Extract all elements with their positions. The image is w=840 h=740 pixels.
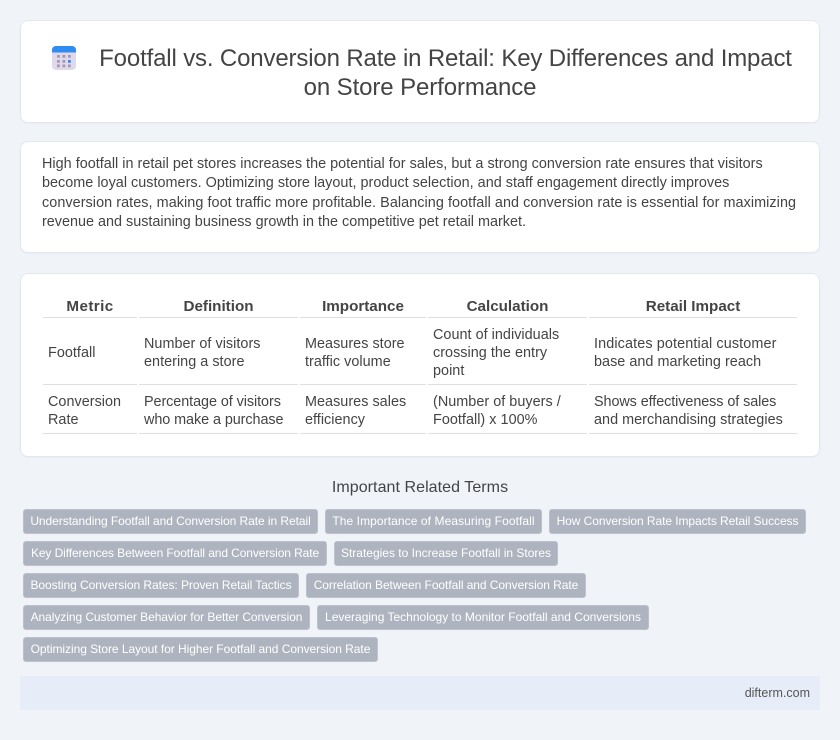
row: conversion rate: Measures sales [305,394,406,410]
related term chips: Optimizing Store Layout for Higher Footfall and Conversion Rate [31,642,370,656]
row: footfall: Count of individuals [433,327,559,343]
header row: Retail Impact [646,298,740,315]
icon: calendar [52,46,76,70]
related term chips: Understanding Footfall and Conversion Rate in Retail [30,514,311,528]
related term chips: Strategies to Increase Footfall in Stores [341,546,551,560]
title: Footfall vs. Conversion Rate in Retail: Key Differences and Impact [99,45,792,72]
related term chips: How Conversion Rate Impacts Retail Success [557,514,798,528]
row: conversion rate: Footfall) x 100% [433,412,537,428]
row: conversion rate: Shows effectiveness of sales [594,394,776,410]
row: conversion rate: and merchandising strategies [594,412,783,428]
header panel [20,20,820,123]
intro paragraph: become loyal customers. Optimizing store layout, product selection, and staff engagement directly improves [42,175,729,191]
header row [66,298,740,315]
comparison table [43,298,797,434]
related terms heading: Important Related Terms [332,478,508,496]
title [99,45,792,101]
row: conversion rate: (Number of buyers / [433,394,561,410]
title: on Store Performance [304,74,536,101]
related term chips: Analyzing Customer Behavior for Better Conversion [31,610,302,624]
row: conversion rate: Conversion [48,394,121,410]
intro text panel [20,141,820,253]
related term chips: Key Differences Between Footfall and Conversion Rate [31,546,319,560]
footer bar [20,676,820,710]
row: footfall: Indicates potential customer [594,336,777,352]
row: footfall: point [433,363,464,379]
header row: Calculation [467,298,548,315]
header row: Metric [66,298,114,315]
row: footfall [48,327,777,379]
row: conversion rate: Percentage of visitors [144,394,281,410]
row: footfall: Measures store [305,336,405,352]
row: conversion rate: who make a purchase [144,412,283,428]
related term chips [23,509,806,662]
intro paragraph: conversion rates, making foot traffic more profitable. Balancing footfall and conversion rate is essential for maximizing [42,194,796,210]
row: conversion rate: Rate [48,412,79,428]
comparison table panel [20,273,820,457]
row: footfall: base and marketing reach [594,354,761,370]
header row: Importance [322,298,404,315]
row: footfall: Number of visitors [144,336,260,352]
row: conversion rate: efficiency [305,412,365,428]
row: conversion rate [48,394,783,428]
row: footfall: entering a store [144,354,244,370]
footer source: difterm.com [745,686,810,700]
row: footfall: Footfall [48,345,95,361]
header row: Definition [183,298,254,315]
related term chips: Correlation Between Footfall and Conversion Rate [314,578,578,592]
related term chips: Boosting Conversion Rates: Proven Retail Tactics [30,578,292,592]
intro paragraph: revenue and sustaining business growth in the competitive pet retail market. [42,214,526,230]
intro paragraph: High footfall in retail pet stores increases the potential for sales, but a strong conversion rate ensures that visitors [42,156,763,172]
row: footfall: traffic volume [305,354,391,370]
row: footfall: crossing the entry [433,345,547,361]
related term chips: Leveraging Technology to Monitor Footfall and Conversions [325,610,641,624]
related term chips: The Importance of Measuring Footfall [332,514,535,528]
intro paragraph [42,156,796,230]
